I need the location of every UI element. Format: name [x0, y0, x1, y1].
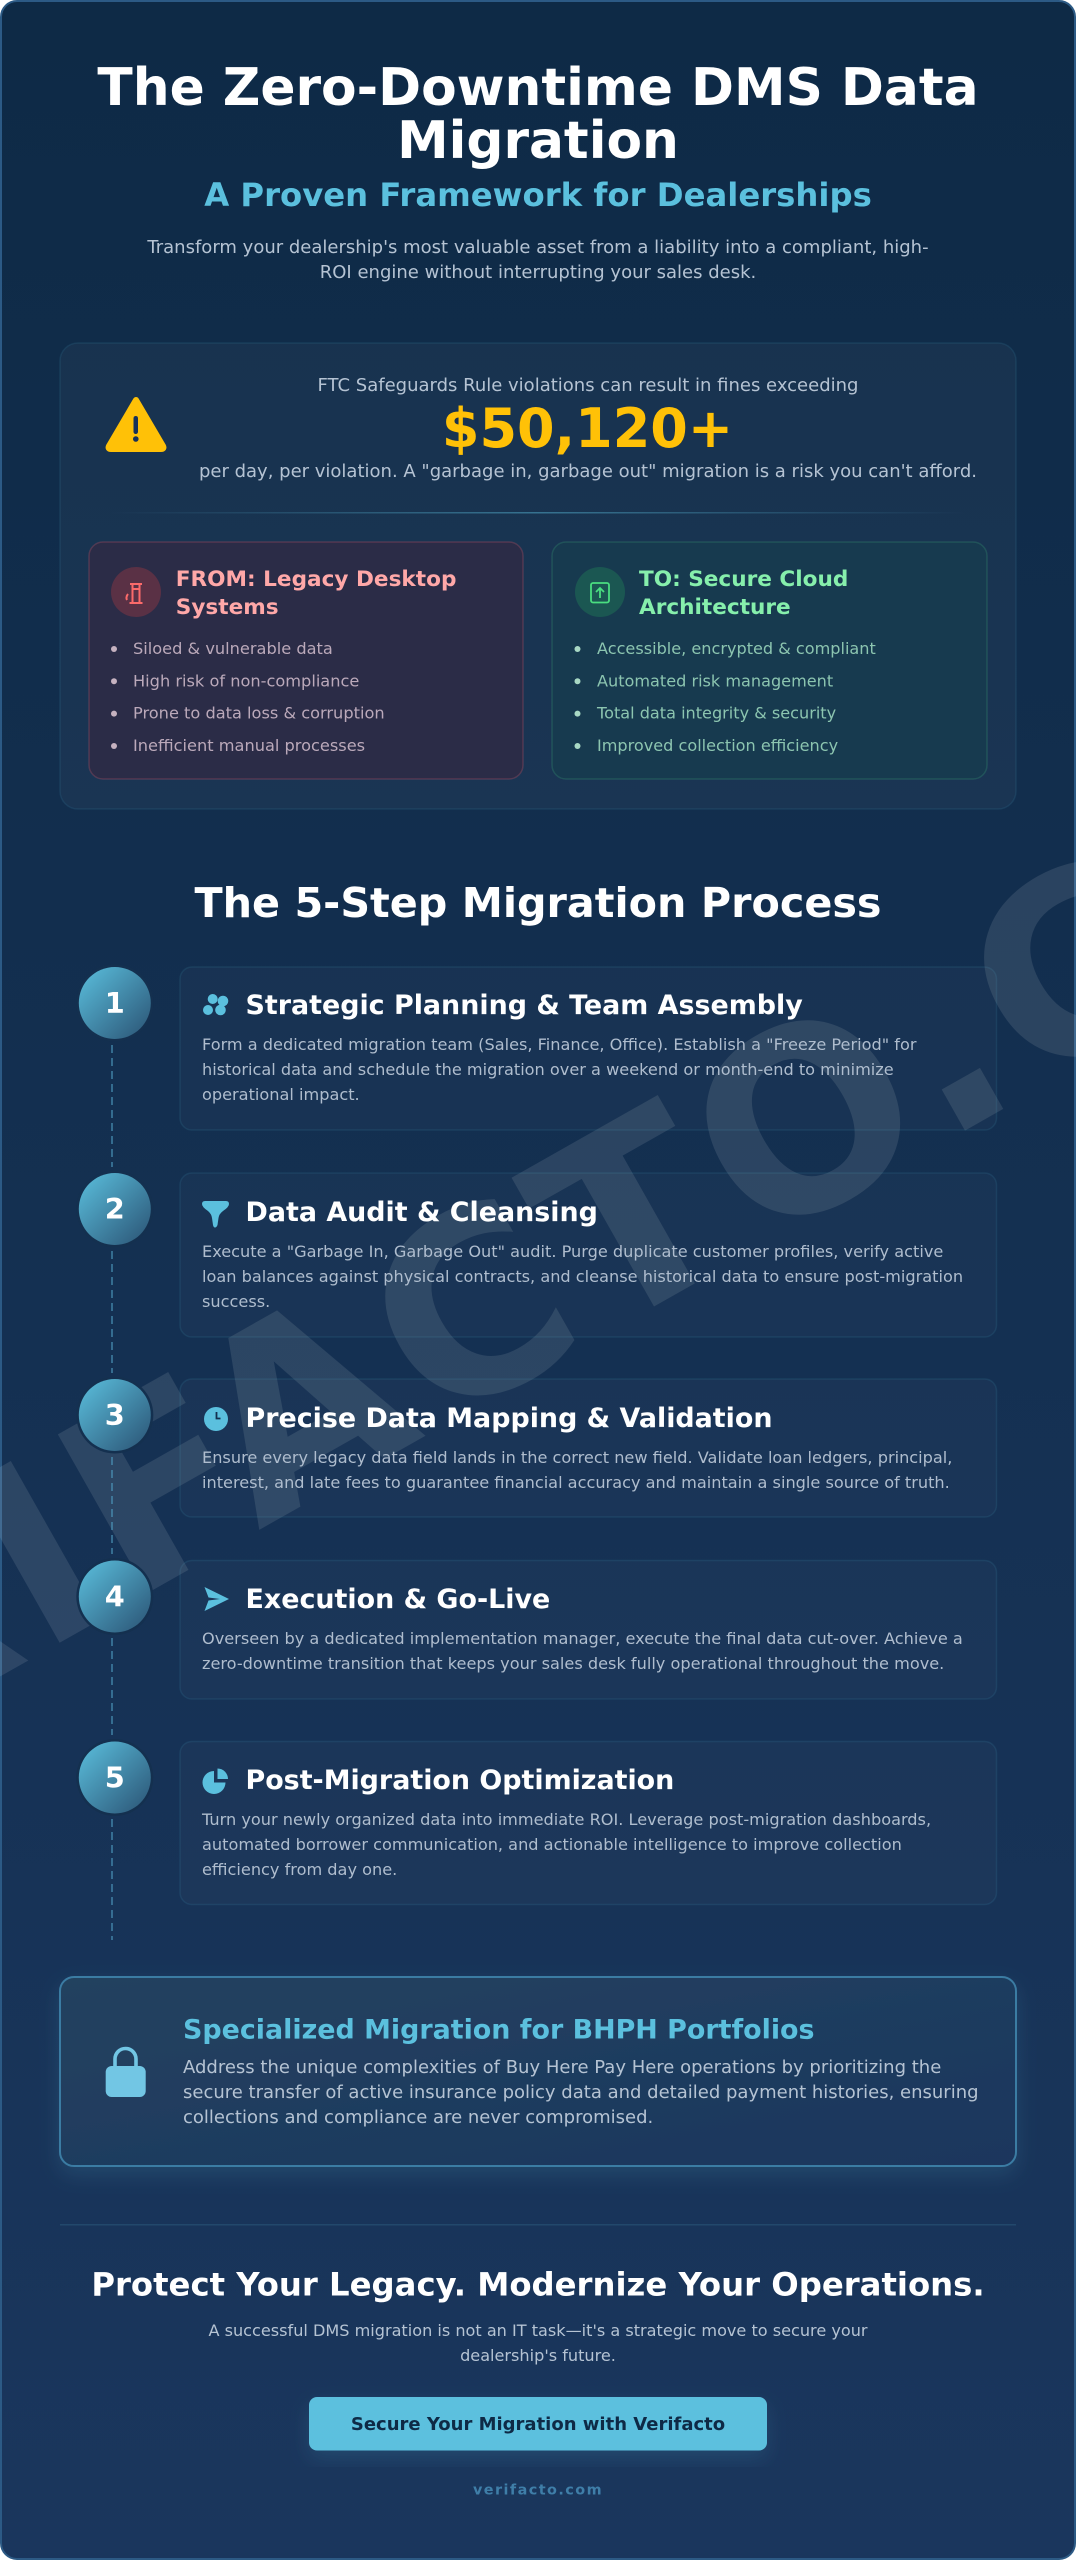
- step 4: [76, 1558, 997, 1699]
- from list: High risk of non-compliance: [133, 671, 359, 690]
- fine detail: per day, per violation. A "garbage in, garbage out" migration is a risk you can't afford.: [199, 461, 977, 482]
- step 1 card: [180, 967, 996, 1130]
- step 3 description: interest, and late fees to guarantee financial accuracy and maintain a single source of truth.: [202, 1473, 950, 1492]
- step 3 description: Ensure every legacy data field lands in the correct new field. Validate loan ledgers, principal,: [202, 1448, 952, 1467]
- intro text: ROI engine without interrupting your sales desk.: [320, 262, 756, 283]
- step 1 description: operational impact.: [202, 1085, 360, 1104]
- callout heading: Specialized Migration for BHPH Portfolios: [183, 2014, 815, 2046]
- step 1 description: Form a dedicated migration team (Sales, Finance, Office). Establish a "Freeze Period" for: [202, 1035, 916, 1054]
- step 3 badge: [76, 1376, 153, 1454]
- step 2 badge: 2: [105, 1192, 125, 1226]
- from list: Prone to data loss & corruption: [133, 704, 385, 723]
- step 3 card: [180, 1379, 996, 1517]
- panel: from legacy: [89, 542, 523, 779]
- CTA heading: Protect Your Legacy. Modernize Your Operations.: [91, 2266, 985, 2304]
- to list: Improved collection efficiency: [597, 736, 839, 755]
- icon: legacy desktop: [111, 567, 161, 617]
- title: The Zero-Downtime DMS Data: [97, 58, 979, 118]
- panel: BHPH callout: [60, 1977, 1016, 2166]
- callout body: secure transfer of active insurance policy data and detailed payment histories, ensuring: [183, 2082, 979, 2103]
- CTA text: A successful DMS migration is not an IT task—it's a strategic move to secure your: [208, 2321, 868, 2340]
- CTA text: dealership's future.: [460, 2346, 616, 2365]
- step 5 title: Post-Migration Optimization: [246, 1765, 674, 1796]
- to list: Automated risk management: [597, 671, 833, 690]
- step 5 description: efficiency from day one.: [202, 1860, 397, 1879]
- header: [97, 58, 979, 283]
- step 4 description: zero-downtime transition that keeps your sales desk fully operational throughout the move.: [202, 1654, 944, 1673]
- step 4 card: [180, 1560, 996, 1699]
- fine warning text: FTC Safeguards Rule violations can result in fines exceeding: [318, 375, 858, 396]
- panel: risk and transformation: [60, 343, 1016, 809]
- CTA button: [309, 2397, 767, 2450]
- website: verifacto.com: [473, 2482, 603, 2498]
- step 5 description: automated borrower communication, and actionable intelligence to improve collection: [202, 1835, 902, 1854]
- step 3: [76, 1376, 997, 1517]
- to list: Accessible, encrypted & compliant: [597, 639, 876, 658]
- to list: [574, 639, 876, 755]
- fine amount: $50,120+: [442, 397, 733, 460]
- step 1 title: Strategic Planning & Team Assembly: [246, 990, 803, 1021]
- icon: lock: [106, 2048, 146, 2097]
- step 2 description: loan balances against physical contracts, and cleanse historical data to ensure post-migration: [202, 1267, 963, 1286]
- from heading: FROM: Legacy Desktop: [176, 567, 456, 592]
- to heading: Architecture: [639, 595, 791, 620]
- step 5 badge: 5: [105, 1760, 125, 1794]
- callout body: Address the unique complexities of Buy Here Pay Here operations by prioritizing the: [183, 2057, 941, 2078]
- icon: team: [203, 994, 228, 1015]
- step 2 badge: [76, 1170, 153, 1248]
- icon: clock: [204, 1407, 228, 1431]
- to heading: TO: Secure Cloud: [639, 567, 848, 592]
- icon: pie chart: [202, 1768, 228, 1794]
- icon: paper plane: [204, 1587, 229, 1611]
- step 5 card: [180, 1742, 996, 1904]
- from list: [111, 639, 385, 755]
- from heading: Systems: [176, 595, 279, 620]
- section heading: The 5-Step Migration Process: [194, 879, 882, 927]
- step 2 description: Execute a "Garbage In, Garbage Out" audit. Purge duplicate customer profiles, verify active: [202, 1242, 943, 1261]
- step 1 badge: 1: [105, 986, 125, 1020]
- step 5 badge: [76, 1739, 153, 1816]
- step 3 title: Precise Data Mapping & Validation: [246, 1403, 772, 1434]
- panel: to cloud: [552, 542, 987, 779]
- from list: Inefficient manual processes: [133, 736, 365, 755]
- icon: secure cloud upload: [575, 567, 625, 617]
- timeline connector: [111, 1045, 113, 1940]
- icon: funnel: [202, 1201, 229, 1228]
- icon: warning triangle: [109, 400, 163, 449]
- from list: Siloed & vulnerable data: [133, 639, 333, 658]
- step 2 card: [180, 1173, 996, 1337]
- call to action: [91, 2266, 985, 2498]
- step 3 badge: 3: [105, 1398, 125, 1432]
- title: Migration: [397, 111, 679, 171]
- step 2 description: success.: [202, 1292, 270, 1311]
- step 1 badge: [76, 964, 153, 1042]
- step 5 description: Turn your newly organized data into immediate ROI. Leverage post-migration dashboards,: [202, 1810, 931, 1829]
- to list: Total data integrity & security: [596, 704, 837, 723]
- step 4 badge: 4: [105, 1580, 125, 1614]
- step 4 description: Overseen by a dedicated implementation manager, execute the final data cut-over. Achieve a: [202, 1629, 963, 1648]
- CTA button: Secure Your Migration with Verifacto: [351, 2414, 725, 2435]
- step 1: [76, 964, 997, 1130]
- step 4 title: Execution & Go-Live: [246, 1584, 550, 1615]
- subtitle: A Proven Framework for Dealerships: [204, 176, 872, 214]
- step 1 description: historical data and schedule the migration over a weekend or month-end to minimize: [202, 1060, 894, 1079]
- intro text: Transform your dealership's most valuable asset from a liability into a compliant, high-: [147, 237, 929, 258]
- callout body: collections and compliance are never compromised.: [183, 2107, 653, 2128]
- step 4 badge: [76, 1558, 153, 1635]
- step 5: [76, 1739, 997, 1904]
- step 2 title: Data Audit & Cleansing: [246, 1197, 598, 1228]
- step 2: [76, 1170, 997, 1337]
